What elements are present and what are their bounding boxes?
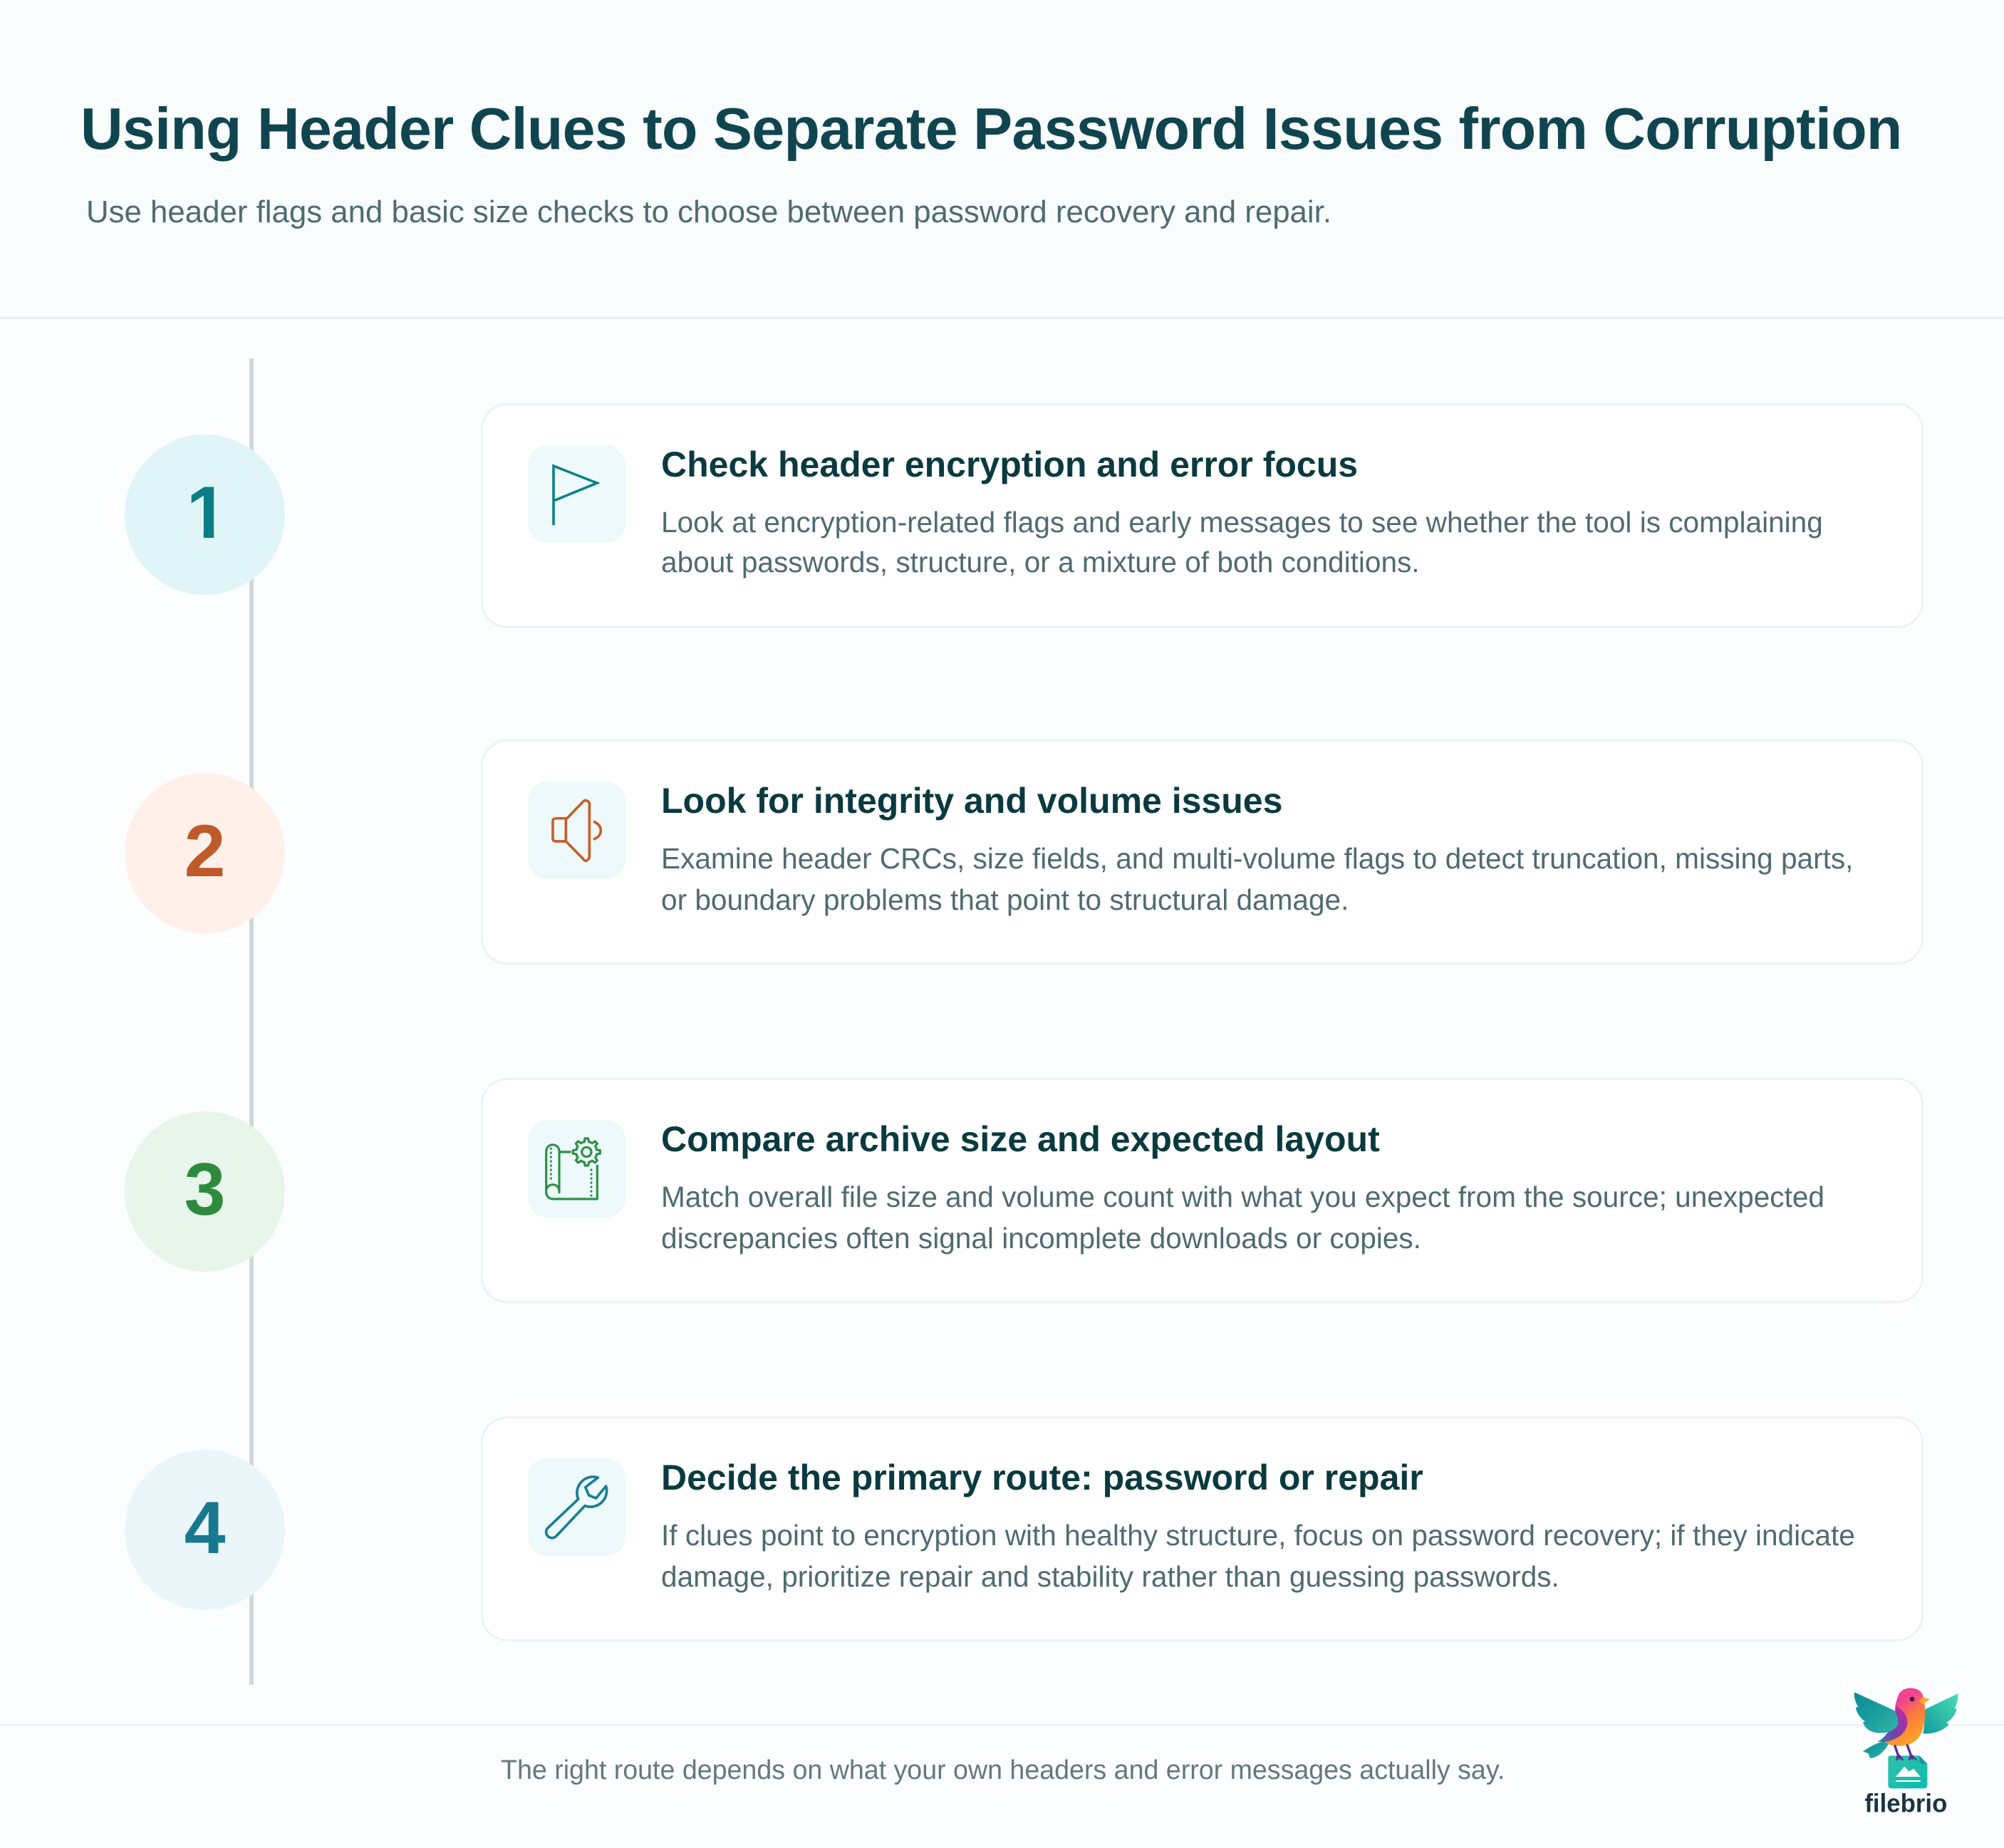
icon: speaker xyxy=(528,782,625,879)
image glyph xyxy=(1896,1766,1921,1777)
step 2 description: Examine header CRCs, size fields, and multi-volume flags to detect truncation, missing parts, xyxy=(661,842,1853,875)
step number 4 xyxy=(125,1450,285,1610)
logo: filebrio bird xyxy=(1854,1688,1958,1817)
wordmark: filebrio xyxy=(1864,1788,1947,1817)
timeline line xyxy=(249,358,254,1685)
step 3 description: discrepancies often signal incomplete downloads or copies. xyxy=(661,1222,1421,1255)
panel: step 3 card xyxy=(481,1078,1923,1303)
step number 1 xyxy=(125,435,285,595)
step 4 description xyxy=(661,1519,1855,1593)
icon: flag xyxy=(528,445,625,543)
step number 1: 1 xyxy=(187,472,227,554)
step number 4: 4 xyxy=(185,1487,225,1569)
panel: step 2 card xyxy=(481,739,1923,965)
step 1 heading: Check header encryption and error focus xyxy=(661,445,1358,484)
step 2 description: or boundary problems that point to structural damage. xyxy=(661,883,1349,916)
step number 2: 2 xyxy=(185,810,225,893)
belly shade xyxy=(1878,1706,1907,1742)
header band xyxy=(0,0,2004,319)
left wing xyxy=(1854,1693,1898,1733)
tail xyxy=(1863,1741,1889,1758)
step 3 description: Match overall file size and volume count with what you expect from the source; unexpected xyxy=(661,1180,1824,1213)
step 4 description: damage, prioritize repair and stability rather than guessing passwords. xyxy=(661,1560,1559,1593)
panel: step 4 card xyxy=(481,1416,1923,1641)
right wing xyxy=(1923,1694,1958,1734)
legs xyxy=(1895,1745,1912,1758)
step number 3: 3 xyxy=(185,1148,225,1231)
step 1 description xyxy=(661,506,1823,578)
step 1 description: about passwords, structure, or a mixture of both conditions. xyxy=(661,546,1420,578)
title: Using Header Clues to Separate Password Issues from Corruption xyxy=(81,96,1902,162)
step number 2 xyxy=(125,773,285,933)
footer note: The right route depends on what your own headers and error messages actually say. xyxy=(501,1755,1505,1785)
step 3 description xyxy=(661,1180,1824,1255)
document xyxy=(1888,1755,1927,1788)
icon: wrench xyxy=(528,1458,625,1556)
footer divider xyxy=(0,1724,2004,1726)
step number 3 xyxy=(125,1111,285,1272)
panel: step 1 card xyxy=(481,403,1923,628)
body xyxy=(1877,1688,1925,1746)
toes xyxy=(1896,1755,1916,1760)
step 2 description xyxy=(661,842,1853,916)
step 1 description: Look at encryption-related flags and early messages to see whether the tool is complaining xyxy=(661,506,1823,539)
eye xyxy=(1910,1697,1914,1701)
subtitle: Use header flags and basic size checks to choose between password recovery and repair. xyxy=(86,194,1331,229)
beak xyxy=(1919,1697,1930,1705)
step 3 heading: Compare archive size and expected layout xyxy=(661,1119,1380,1159)
step 2 heading: Look for integrity and volume issues xyxy=(661,781,1282,821)
icon: blueprint with gear xyxy=(528,1120,625,1218)
step 4 description: If clues point to encryption with healthy structure, focus on password recovery; if they indicate xyxy=(661,1519,1855,1552)
document fold xyxy=(1919,1755,1927,1764)
step 4 heading: Decide the primary route: password or repair xyxy=(661,1458,1423,1497)
